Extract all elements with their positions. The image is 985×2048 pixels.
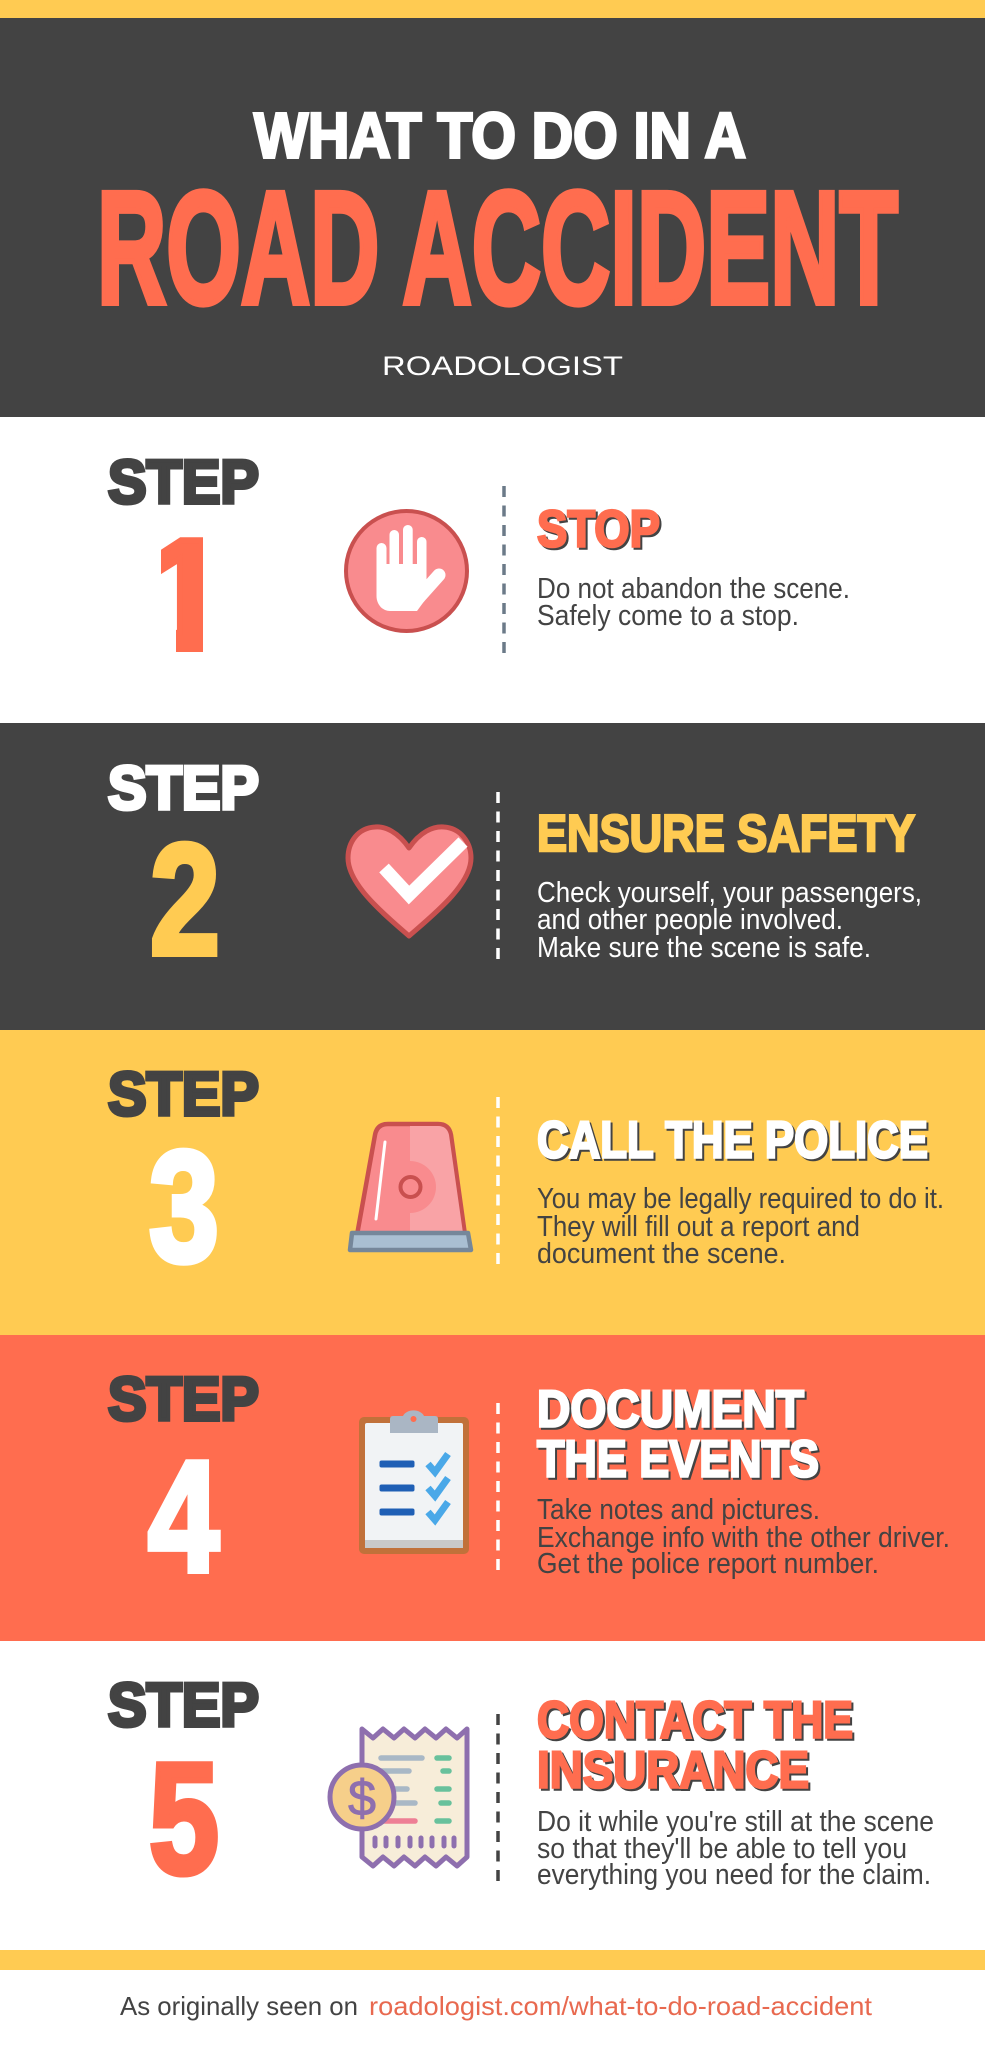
- step 5 body text: Do it while you're still at the scene: [537, 1806, 934, 1838]
- icon: receipt with coin: $: [348, 1770, 376, 1826]
- step 5 heading: CONTACT THE: [537, 1692, 853, 1750]
- step 5 number: 5: [149, 1731, 219, 1907]
- brand name: ROADOLOGIST: [382, 351, 623, 381]
- step 4 label: STEP: [108, 1365, 259, 1433]
- panel: step 5: [0, 1641, 985, 1950]
- step 5 heading: [537, 1692, 853, 1800]
- title line 1: WHAT TO DO IN A: [254, 100, 746, 172]
- step 1 body text: Safely come to a stop.: [537, 600, 799, 632]
- step 2 label: STEP: [108, 754, 259, 822]
- step 2 body text: [537, 877, 922, 964]
- icon: clipboard checklist: [359, 1410, 469, 1554]
- step 4 heading: DOCUMENT: [537, 1380, 804, 1438]
- step 3 body text: document the scene.: [537, 1238, 786, 1270]
- step 3 body text: They will fill out a report and: [537, 1211, 860, 1243]
- step 1 body text: [537, 573, 850, 632]
- step 2 body text: Make sure the scene is safe.: [537, 932, 871, 964]
- step 3 number: 3: [149, 1119, 219, 1295]
- step 5 body text: everything you need for the claim.: [537, 1859, 931, 1891]
- step 5 body text: [537, 1806, 934, 1891]
- step 3 label: STEP: [108, 1060, 259, 1128]
- divider 5: [496, 1714, 500, 1884]
- step 4 body text: [537, 1494, 950, 1580]
- step 5 body text: so that they'll be able to tell you: [537, 1833, 907, 1865]
- step 5 label: STEP: [108, 1671, 259, 1739]
- step 4 heading: [537, 1380, 819, 1488]
- footer: [120, 1991, 873, 2021]
- step 4 body text: Take notes and pictures.: [537, 1494, 820, 1526]
- step 1 number: 1: [143, 507, 231, 683]
- step 2 heading: ENSURE SAFETY: [537, 805, 915, 863]
- icon: receipt with coin: [330, 1729, 467, 1866]
- step 1 heading: STOP: [537, 500, 660, 558]
- step 4 body text: Get the police report number.: [537, 1548, 879, 1580]
- header panel: [0, 18, 985, 417]
- step 2 body text: Check yourself, your passengers,: [537, 877, 922, 909]
- panel: step 2: [0, 723, 985, 1030]
- icon: police beacon: [350, 1124, 471, 1250]
- footer link: roadologist.com/what-to-do-road-accident: [369, 1991, 873, 2021]
- step 4 heading: THE EVENTS: [537, 1430, 819, 1488]
- icon: heart with check: [348, 827, 471, 936]
- step 4 body text: Exchange info with the other driver.: [537, 1522, 950, 1554]
- divider 3: [496, 1097, 500, 1267]
- bottom yellow band: [0, 1950, 985, 1970]
- panel: step 1: [107, 458, 848, 653]
- step 2 number: 2: [150, 812, 220, 988]
- icon: stop hand: [346, 511, 467, 631]
- panel: step 3: [0, 1030, 985, 1335]
- step 3 body text: [537, 1183, 944, 1270]
- step 2 body text: and other people involved.: [537, 904, 843, 936]
- step 1 label: STEP: [108, 448, 259, 516]
- footer lead-in: As originally seen on: [120, 1991, 358, 2021]
- step 3 body text: You may be legally required to do it.: [537, 1183, 944, 1215]
- step 4 number: 4: [148, 1429, 219, 1605]
- top yellow band: [0, 0, 985, 18]
- divider 4: [496, 1403, 500, 1573]
- panel: step 4: [0, 1335, 985, 1641]
- divider 2: [496, 792, 500, 960]
- step 1 body text: Do not abandon the scene.: [537, 573, 850, 605]
- step 5 heading: INSURANCE: [537, 1742, 809, 1800]
- divider 1: [502, 486, 506, 655]
